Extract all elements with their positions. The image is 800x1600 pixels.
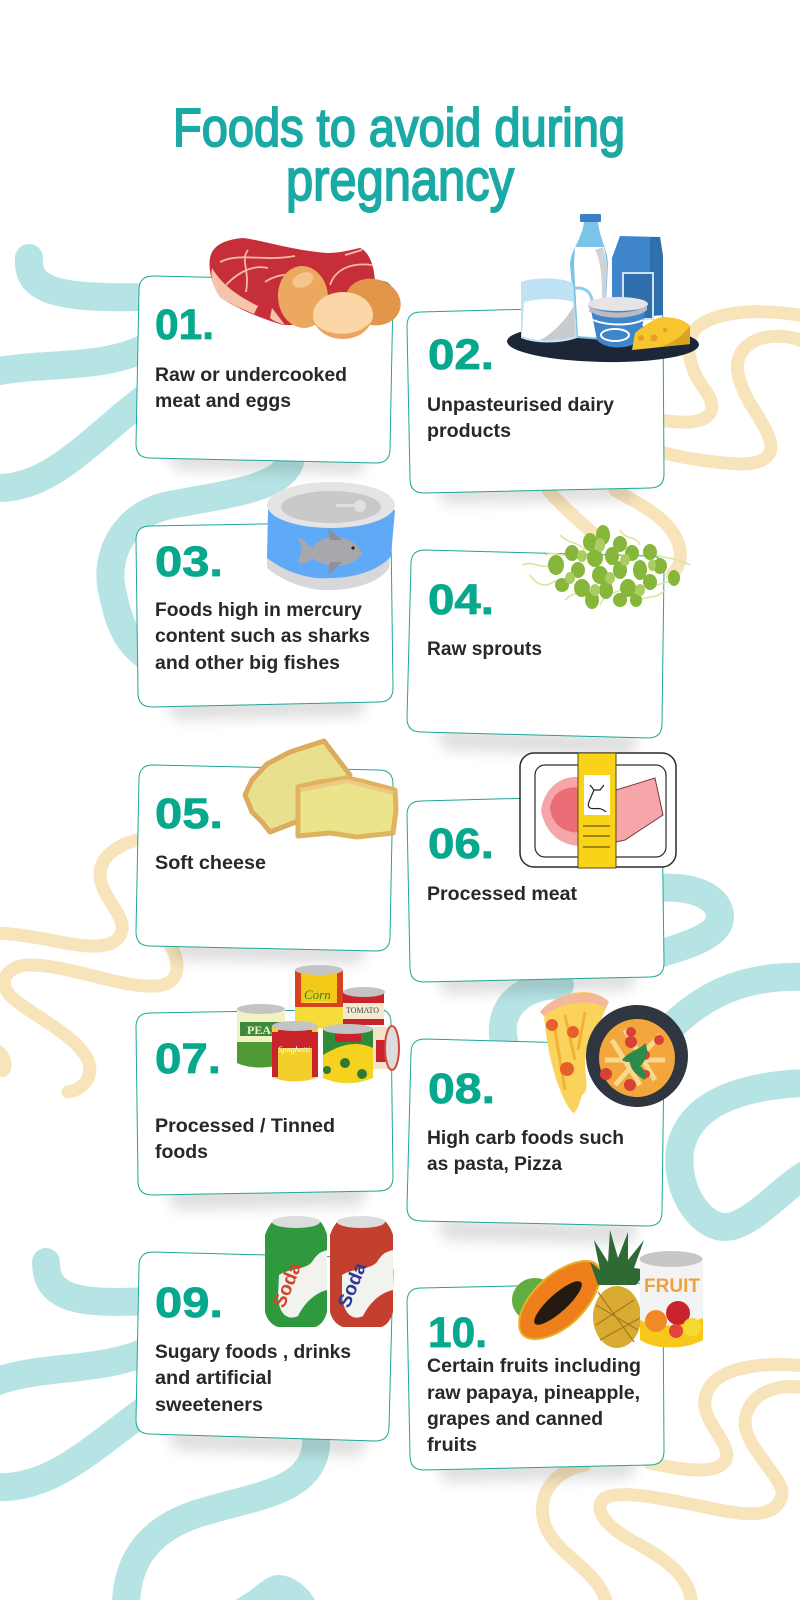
panel: card 10 [407,1230,703,1482]
card 07 text: Processed / Tinned [155,1116,335,1137]
can: side tin [372,1026,399,1070]
panel: card 06 [407,753,676,994]
number 04: 04. [428,576,494,624]
number 10: 10. [428,1309,487,1357]
card 08 text: High carb foods such [427,1128,624,1149]
card 08 text: as pasta, Pizza [427,1154,562,1175]
can: spaghetti [272,1021,318,1082]
can: green soda: Soda [269,1260,306,1311]
card 10 text: Certain fruits including [427,1356,641,1377]
can: tomato soup: TOMATO [346,1006,379,1015]
icon: dairy products on a plate [507,214,699,364]
icon: packaged processed meat [520,753,676,868]
can: yellow vegetables [323,1024,373,1083]
panel: card 07 [136,965,399,1210]
title [173,98,625,213]
card 09 text [155,1342,351,1416]
card 02 text: products [427,421,511,442]
card 06 text: Processed meat [427,884,578,905]
icon: tin of fish [267,482,395,590]
can: peas [237,1004,285,1068]
card 10 text [427,1356,641,1456]
icon: soda cans [265,1216,393,1327]
card 05 text: Soft cheese [155,853,266,874]
can: tomato soup [343,987,385,1025]
icon: raw sprouts [522,525,690,609]
number 05: 05. [155,790,223,838]
card 03 text [155,600,370,674]
icon: pizza slice and pasta bowl [540,992,688,1113]
icon: tinned food cans [237,965,399,1083]
panel: card 03 [136,482,395,720]
number 02: 02. [428,331,494,379]
card 03 text: and other big fishes [155,653,340,674]
card 02 text [427,395,614,442]
number 03: 03. [155,538,223,586]
card 04 text: Raw sprouts [427,639,542,660]
icon: soft cheese [245,741,396,837]
can: corn: Corn [304,987,331,1002]
icon: papaya, pineapple and canned fruit [512,1230,703,1348]
can: corn [295,965,343,1028]
can: peas: PEAS [247,1023,278,1037]
can: spaghetti: Spaghetti [278,1044,311,1054]
card 01 text [155,365,347,412]
number 06: 06. [428,820,494,868]
title: Foods to avoid during [173,98,625,158]
card 01 text: Raw or undercooked [155,365,347,386]
card 02 text: Unpasteurised dairy [427,395,614,416]
card 09 text: Sugary foods , drinks [155,1342,351,1363]
card 09 text: and artificial [155,1368,272,1389]
card 10 text: fruits [427,1435,477,1456]
card 03 text: Foods high in mercury [155,600,362,621]
number 07: 07. [155,1035,221,1083]
card 03 text: content such as sharks [155,626,370,647]
panel: card 05 [136,741,396,964]
card 09 text: sweeteners [155,1395,263,1416]
panel: card 02 [407,214,699,504]
card 10 text: grapes and canned [427,1409,603,1430]
panel: card 08 [407,992,688,1244]
panel: card 04 [407,525,690,756]
can: red soda: Soda [334,1260,371,1311]
title: pregnancy [286,148,514,213]
number 09: 09. [155,1279,223,1327]
card 08 text [427,1128,624,1175]
card 01 text: meat and eggs [155,391,291,412]
panel: card 01 [136,238,406,474]
icon: papaya, pineapple and canned fruit: FRUIT [644,1276,700,1297]
card 07 text: foods [155,1142,208,1163]
number 01: 01. [155,301,214,349]
card 07 text [155,1116,335,1163]
card 10 text: raw papaya, pineapple, [427,1383,640,1404]
panel: card 09 [136,1216,393,1456]
icon: raw meat and eggs [209,238,406,339]
number 08: 08. [428,1065,495,1113]
